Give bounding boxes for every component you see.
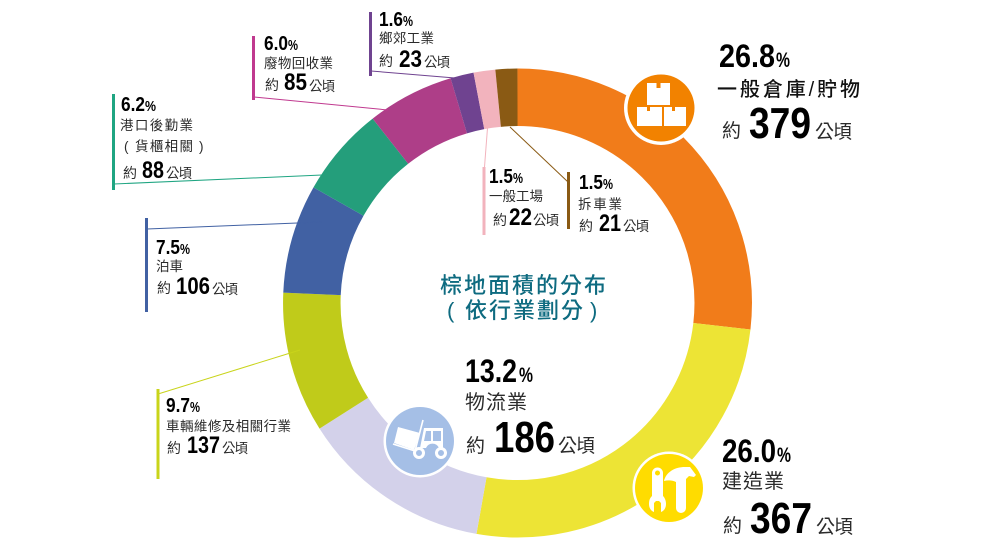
label: 泊車: % (180, 241, 190, 258)
label: 物流業: 186 (494, 413, 555, 462)
label: 物流業: 13.2 (465, 353, 517, 389)
label: 一般工場: % (513, 170, 523, 187)
leader: 一般工場 (484, 128, 488, 235)
label: 一般倉庫/貯物: % (776, 49, 790, 72)
label: 泊車: 公頃 (212, 282, 238, 297)
label: 泊車: 泊車 (156, 259, 183, 274)
segment: 建造業 26.0% (482, 326, 722, 509)
label: 廢物回收業: 廢物回收業 (264, 56, 333, 71)
label: 拆車業: 約 (579, 218, 593, 234)
label: 鄉郊工業 (379, 9, 450, 73)
label: 一般工場: 一般工場 (489, 189, 543, 204)
segment: 一般工場 1.5% (479, 98, 498, 101)
label: 港口後勤業 (120, 94, 204, 184)
label: 港口後勤業: 約 (123, 165, 137, 181)
label: 物流業: % (519, 364, 533, 387)
label: 鄉郊工業: 約 (379, 53, 393, 69)
icon: forklift (384, 404, 456, 478)
center title: ( (447, 298, 455, 323)
label: 拆車業: 1.5 (579, 172, 603, 194)
label: 一般倉庫/貯物: 379 (749, 99, 811, 148)
segment: 鄉郊工業 1.6% (459, 101, 479, 106)
label: 一般工場 (489, 166, 560, 231)
label: 車輛維修及相關行業: 9.7 (166, 395, 190, 417)
label: 一般倉庫/貯物: 26.8 (719, 38, 775, 74)
label: 港口後勤業: 港口後勤業 (120, 118, 193, 133)
label: 建造業: 26.0 (722, 433, 776, 469)
center title (440, 273, 606, 323)
label: 一般工場: 公頃 (533, 213, 560, 228)
leader: 拆車業 (510, 127, 568, 229)
segment: 拆車業 1.5% (498, 68, 518, 127)
label: 一般工場: 22 (509, 204, 532, 231)
segment: 廢物回收業 6.0% (390, 106, 459, 141)
label: 廢物回收業: 約 (265, 77, 279, 93)
label: 廢物回收業 (264, 33, 336, 96)
label: 物流業: 約 (466, 435, 485, 457)
donut chart (312, 97, 723, 509)
label: 港口後勤業: 公頃 (166, 166, 192, 181)
label: 拆車業 (578, 172, 650, 237)
label: 一般工場: 約 (493, 212, 507, 228)
label: 建造業: 公頃 (816, 516, 853, 538)
label: 車輛維修及相關行業: 車輛維修及相關行業 (166, 419, 291, 434)
label: 建造業: 建造業 (722, 470, 784, 493)
label: 鄉郊工業: 鄉郊工業 (379, 30, 434, 46)
segment: 港口後勤業 6.2% (338, 141, 390, 202)
center title: 依行業劃分 (465, 298, 583, 323)
label: 鄉郊工業: 1.6 (379, 9, 403, 31)
label: 車輛維修及相關行業: 公頃 (222, 441, 248, 456)
label: 拆車業: % (603, 176, 613, 193)
label: 一般工場: 1.5 (489, 166, 513, 188)
label: 車輛維修及相關行業: 137 (187, 432, 220, 459)
label: 鄉郊工業: 23 (399, 46, 422, 73)
leader: 鄉郊工業 (370, 12, 455, 78)
label: 一般倉庫/貯物: 約 (722, 120, 741, 142)
segment: 物流業 13.2% (344, 413, 482, 506)
leader: 車輛維修及相關行業 (158, 350, 300, 479)
label: 鄉郊工業: % (403, 13, 413, 30)
leader: 港口後勤業 (114, 94, 322, 190)
label: 一般倉庫/貯物 (717, 38, 860, 148)
label: 物流業: 公頃 (558, 435, 595, 457)
segment: 車輛維修及相關行業 9.7% (312, 294, 344, 413)
label: 拆車業: 公頃 (623, 219, 650, 234)
label: 廢物回收業: 6.0 (264, 33, 288, 55)
label: 車輛維修及相關行業 (166, 395, 291, 459)
label: 一般倉庫/貯物: 公頃 (815, 121, 852, 143)
label: 泊車: 7.5 (156, 237, 180, 259)
label: 車輛維修及相關行業: % (190, 399, 200, 416)
label: 港口後勤業: 貨櫃相關 (135, 138, 193, 154)
segment: 泊車 7.5% (312, 202, 338, 294)
icon: boxes (624, 71, 698, 145)
label: 泊車: 106 (176, 273, 210, 300)
label: 泊車: 約 (157, 280, 171, 296)
label: 拆車業: 21 (599, 210, 621, 237)
label: 物流業 (465, 353, 595, 462)
label: 港口後勤業: ( (124, 139, 129, 154)
label: 建造業: 約 (723, 515, 742, 537)
label: 鄉郊工業: 公頃 (424, 55, 450, 70)
label: 廢物回收業: % (288, 37, 298, 54)
label: 廢物回收業: 85 (284, 69, 307, 96)
label: 拆車業: 拆車業 (578, 197, 622, 212)
label: 建造業 (722, 433, 853, 543)
label: 港口後勤業: ) (199, 139, 204, 154)
label: 建造業: 367 (750, 494, 812, 543)
label: 車輛維修及相關行業: 約 (167, 440, 181, 456)
label: 港口後勤業: 88 (142, 157, 164, 184)
label: 建造業: % (777, 444, 791, 467)
label: 物流業: 物流業 (465, 391, 527, 414)
label: 港口後勤業: % (145, 98, 156, 115)
label: 泊車 (156, 237, 238, 300)
center title: 棕地面積的分布 (440, 273, 606, 298)
leader: 廢物回收業 (254, 36, 388, 110)
label: 港口後勤業: 6.2 (121, 94, 145, 116)
icon: tools (632, 452, 706, 524)
label: 廢物回收業: 公頃 (309, 79, 336, 94)
label: 一般倉庫/貯物: 一般倉庫/貯物 (717, 78, 860, 101)
center title: ) (590, 298, 597, 323)
leader: 泊車 (146, 218, 322, 312)
segment: 一般倉庫/貯物 26.8% (518, 97, 723, 326)
